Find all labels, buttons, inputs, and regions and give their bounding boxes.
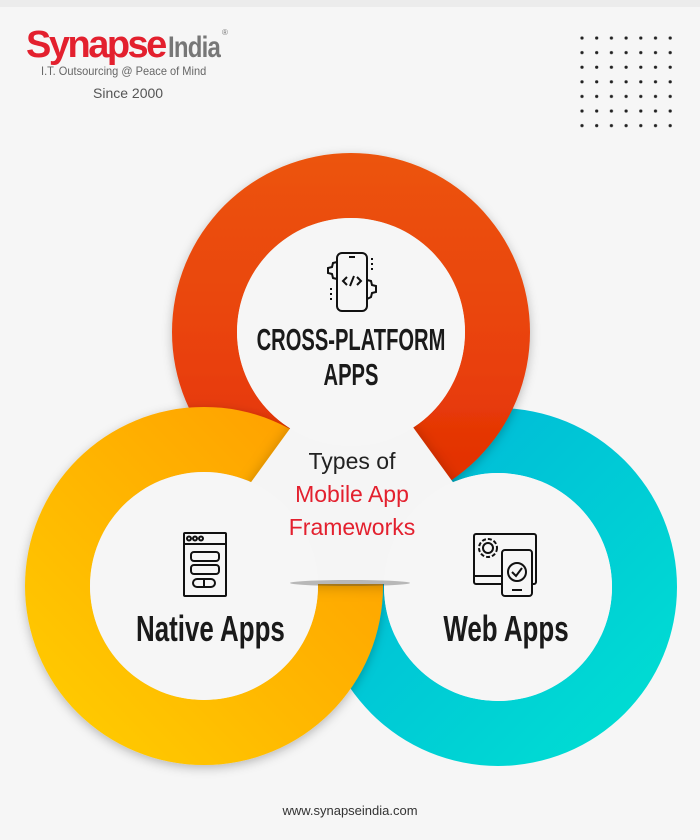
icon: native app screen bbox=[183, 532, 227, 597]
logo wordmark: Synapse bbox=[26, 24, 165, 66]
icon: web app devices bbox=[473, 533, 537, 597]
title highlight: Frameworks bbox=[289, 514, 415, 540]
logo: ® bbox=[222, 28, 228, 37]
center triangle bbox=[185, 350, 519, 580]
base shadow bbox=[290, 580, 410, 586]
dot grid decoration bbox=[580, 36, 672, 128]
ring: cross-platform (red) bbox=[172, 153, 530, 511]
heading: cross-platform apps: CROSS-PLATFORM bbox=[257, 322, 445, 357]
ring: native apps (yellow) bbox=[25, 407, 383, 765]
logo bbox=[26, 24, 228, 101]
heading: cross-platform apps bbox=[257, 322, 445, 392]
title highlight bbox=[289, 481, 415, 540]
icon: cross-platform phone with gears bbox=[327, 252, 377, 312]
inner white discs bbox=[237, 218, 465, 446]
heading: cross-platform apps: APPS bbox=[324, 357, 378, 392]
heading: native apps: Native Apps bbox=[136, 608, 285, 649]
center title: Types of bbox=[309, 448, 395, 474]
tagline: I.T. Outsourcing @ Peace of Mind bbox=[41, 64, 206, 78]
footer url: www.synapseindia.com bbox=[282, 803, 418, 818]
center title bbox=[289, 448, 415, 540]
title highlight: Mobile App bbox=[295, 481, 409, 507]
ring: web apps (cyan) bbox=[319, 408, 677, 766]
since 2000: Since 2000 bbox=[93, 85, 163, 101]
heading: web apps: Web Apps bbox=[443, 608, 569, 649]
logo wordmark: India bbox=[168, 31, 220, 64]
